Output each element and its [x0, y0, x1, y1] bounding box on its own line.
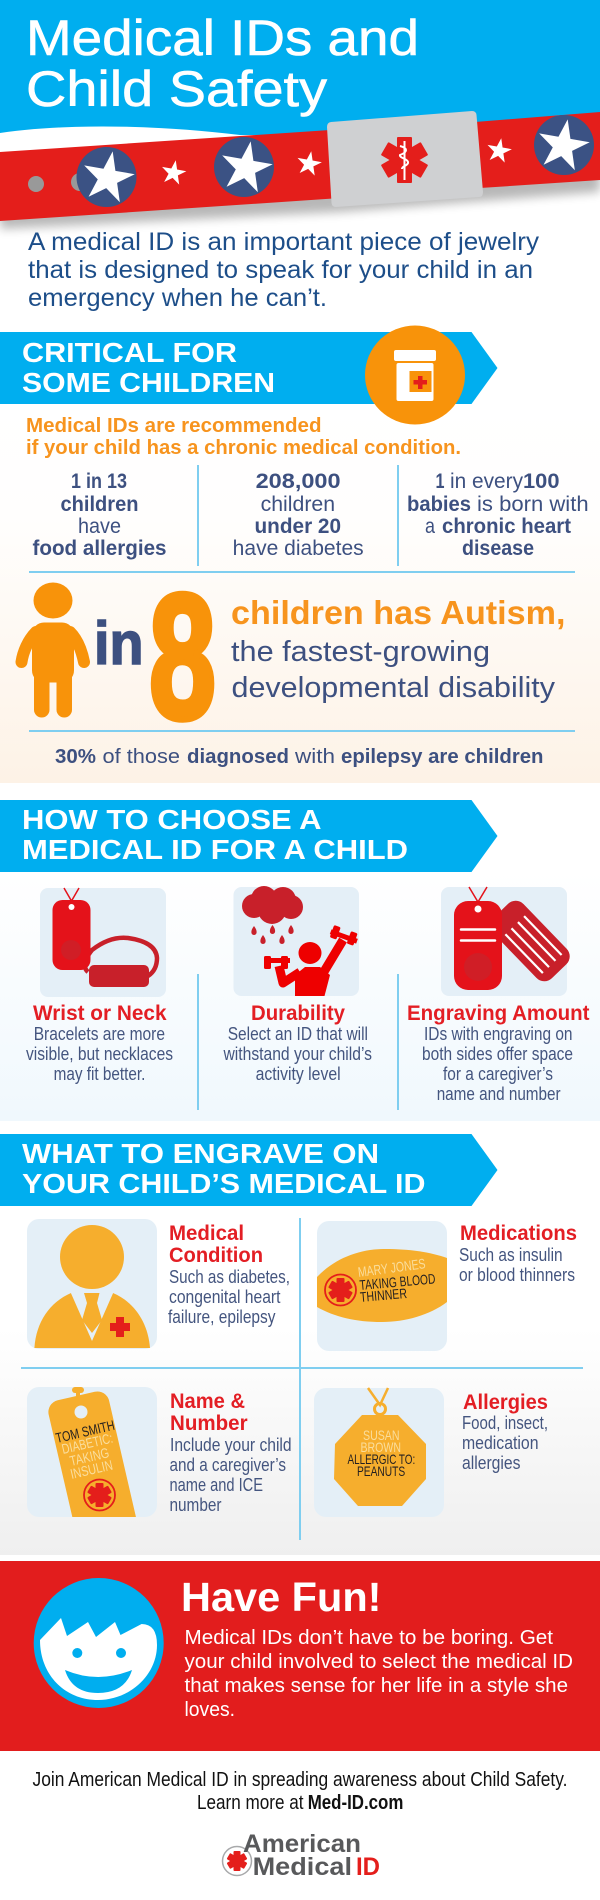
- stat: diabetes: under 20: [254, 515, 341, 538]
- icon: allergies tag: [314, 1388, 444, 1517]
- autism text: [231, 594, 566, 704]
- text: name and number: name and ICE: [170, 1475, 263, 1495]
- icon: allergies tag: PEANUTS: [357, 1463, 405, 1479]
- stat: diabetes: 208,000: [256, 470, 341, 493]
- stat: food allergies: children: [60, 493, 138, 516]
- recommendation text: [26, 415, 461, 459]
- text: engraving amount: [407, 1002, 590, 1104]
- icon: medicine bottle: [365, 326, 465, 424]
- text: durability: activity level: [256, 1064, 341, 1084]
- icon: name and number tag: [27, 1387, 157, 1517]
- title: [26, 10, 419, 117]
- text: have fun body: your child involved to select the medical ID: [184, 1651, 573, 1673]
- text: medications: Medications: [460, 1222, 577, 1245]
- text: engraving amount: name and number: [437, 1084, 561, 1104]
- banner: how to choose: MEDICAL ID FOR A CHILD: [22, 834, 408, 865]
- stat: heart disease: [407, 470, 589, 560]
- header background: [0, 0, 600, 240]
- banner: how to choose: [0, 800, 498, 872]
- text: have fun body: loves.: [184, 1699, 235, 1721]
- banner: what to engrave: YOUR CHILD’S MEDICAL ID: [22, 1168, 426, 1199]
- icon: name and number tag: INSULIN: [69, 1457, 114, 1482]
- text: wrist or neck: [26, 1002, 173, 1084]
- statistic: 1 in 8: in: [94, 610, 144, 677]
- text: medical condition: [168, 1222, 290, 1327]
- panel: critical for some children: [0, 326, 600, 783]
- text: medical condition: Such as diabetes,: [169, 1267, 290, 1287]
- panel: how to choose: [0, 800, 600, 1121]
- icon: wrist or neck: [40, 888, 166, 997]
- panel: what to engrave: [0, 1134, 600, 1555]
- statistic: 1 in 8: 8: [149, 557, 216, 756]
- title: Medical IDs and: [26, 10, 419, 66]
- recommendation text: Medical IDs are recommended: [26, 415, 322, 437]
- autism text: developmental disability: [232, 672, 556, 704]
- text: allergies: allergies: [462, 1453, 520, 1473]
- text: name and number: Include your child: [170, 1435, 292, 1455]
- banner: what to engrave: [0, 1134, 498, 1206]
- footer text: Med-ID.com: [308, 1792, 403, 1814]
- intro text: that is designed to speak for your child in an: [28, 256, 533, 284]
- epilepsy statistic: epilepsy are children: [341, 746, 544, 768]
- footer text: [32, 1769, 568, 1814]
- stat: diabetes: children: [261, 493, 335, 516]
- icon: child figure: [22, 582, 84, 718]
- text: medical condition: congenital heart: [169, 1287, 280, 1307]
- epilepsy statistic: 30%: [55, 746, 96, 768]
- icon: allergies tag: SUSAN: [363, 1427, 400, 1443]
- stat: food allergies: food allergies: [32, 537, 166, 560]
- banner: critical for some children: SOME CHILDREN: [22, 367, 275, 398]
- text: engraving amount: IDs with engraving on: [424, 1024, 572, 1044]
- icon: allergies tag: BROWN: [360, 1439, 401, 1455]
- banner: critical for some children: CRITICAL FOR: [22, 337, 237, 368]
- logo: American Medical ID: [222, 1830, 380, 1881]
- stat: diabetes: have diabetes: [233, 537, 364, 560]
- recommendation text: if your child has a chronic medical condition.: [26, 437, 461, 459]
- stat: food allergies: have: [78, 515, 121, 538]
- epilepsy statistic: diagnosed: [187, 746, 289, 768]
- logo: American Medical ID: American: [243, 1830, 361, 1858]
- epilepsy statistic: with: [294, 746, 335, 768]
- logo: American Medical ID: Medical: [253, 1853, 352, 1881]
- autism text: children has Autism,: [231, 594, 566, 631]
- icon: smiling child face: [34, 1578, 164, 1708]
- stat: food allergies: 1 in 13: [71, 470, 127, 493]
- text: have fun body: [184, 1627, 573, 1721]
- stat: heart disease: disease: [462, 537, 534, 560]
- text: wrist or neck: Bracelets are more: [34, 1024, 165, 1044]
- stat: heart disease: chronic heart: [442, 515, 571, 538]
- title: Child Safety: [26, 61, 327, 117]
- stat: heart disease: a: [425, 515, 435, 538]
- text: name and number: number: [170, 1495, 222, 1515]
- text: name and number: and a caregiver’s: [170, 1455, 286, 1475]
- text: medical condition: failure, epilepsy: [168, 1307, 276, 1327]
- footer text: Learn more at: [197, 1792, 304, 1814]
- stat: food allergies: [32, 470, 166, 560]
- banner: what to engrave: WHAT TO ENGRAVE ON: [22, 1138, 379, 1169]
- text: durability: withstand your child’s: [223, 1044, 372, 1064]
- stat: heart disease: is born with: [477, 493, 589, 516]
- text: have fun body: Medical IDs don’t have to be boring. Get: [184, 1627, 553, 1649]
- intro text: emergency when he can’t.: [28, 284, 327, 312]
- text: engraving amount: Engraving Amount: [407, 1002, 590, 1025]
- icon: medications tag: THINNER: [359, 1285, 408, 1305]
- text: allergies: medication: [462, 1433, 538, 1453]
- stat: heart disease: babies: [407, 493, 471, 516]
- logo: American Medical ID: ID: [356, 1853, 380, 1881]
- epilepsy statistic: [55, 746, 544, 768]
- text: name and number: Number: [170, 1412, 248, 1435]
- icon: engraving amount: [441, 887, 574, 996]
- icon: medications tag: MARY JONES: [357, 1255, 426, 1280]
- epilepsy statistic: of those: [102, 746, 180, 768]
- text: medical condition: Condition: [169, 1244, 263, 1267]
- stat: diabetes: [233, 470, 364, 560]
- text: durability: Select an ID that will: [228, 1024, 368, 1044]
- banner: critical for some children: [0, 332, 498, 404]
- intro text: A medical ID is an important piece of jewelry: [28, 228, 540, 256]
- icon: name and number tag: DIABETIC:: [60, 1430, 114, 1457]
- stat: heart disease: 1: [436, 470, 445, 493]
- panel: have fun: [0, 1561, 600, 1751]
- text: medications: Such as insulin: [459, 1245, 563, 1265]
- text: medical condition: Medical: [169, 1222, 244, 1245]
- text: medications: or blood thinners: [459, 1265, 575, 1285]
- text: engraving amount: both sides offer space: [422, 1044, 573, 1064]
- icon: allergies tag: ALLERGIC TO:: [348, 1451, 415, 1467]
- text: durability: Durability: [251, 1002, 345, 1025]
- banner: how to choose: HOW TO CHOOSE A: [22, 804, 322, 835]
- icon: medications tag: [317, 1221, 447, 1351]
- text: allergies: Allergies: [463, 1391, 548, 1414]
- text: allergies: Food, insect,: [462, 1413, 548, 1433]
- text: allergies: [462, 1391, 548, 1473]
- intro text: [28, 228, 540, 312]
- icon: medical condition: [27, 1219, 157, 1349]
- text: wrist or neck: Wrist or Neck: [33, 1002, 167, 1025]
- icon: name and number tag: TOM SMITH: [54, 1417, 116, 1446]
- medical ID bracelet illustration: [0, 111, 600, 229]
- text: durability: [223, 1002, 372, 1084]
- text: wrist or neck: visible, but necklaces: [26, 1044, 173, 1064]
- text: engraving amount: for a caregiver’s: [443, 1064, 553, 1084]
- stat: heart disease: in every: [450, 470, 523, 493]
- icon: durability: [234, 886, 359, 996]
- text: medications: [459, 1222, 577, 1285]
- text: name and number: Name &: [170, 1390, 245, 1413]
- stat: heart disease: 100: [523, 470, 560, 493]
- icon: name and number tag: TAKING: [68, 1444, 111, 1469]
- statistic: 1 in 8: [94, 557, 216, 756]
- icon: medications tag: TAKING BLOOD: [359, 1270, 436, 1293]
- heading: have fun: Have Fun!: [181, 1574, 382, 1620]
- icon: star badges: [76, 115, 594, 207]
- text: name and number: [170, 1390, 292, 1515]
- autism text: the fastest-growing: [231, 636, 490, 668]
- icon: star of life: [381, 137, 428, 183]
- text: wrist or neck: may fit better.: [54, 1064, 145, 1084]
- text: have fun body: that makes sense for her life in a style she: [184, 1675, 568, 1697]
